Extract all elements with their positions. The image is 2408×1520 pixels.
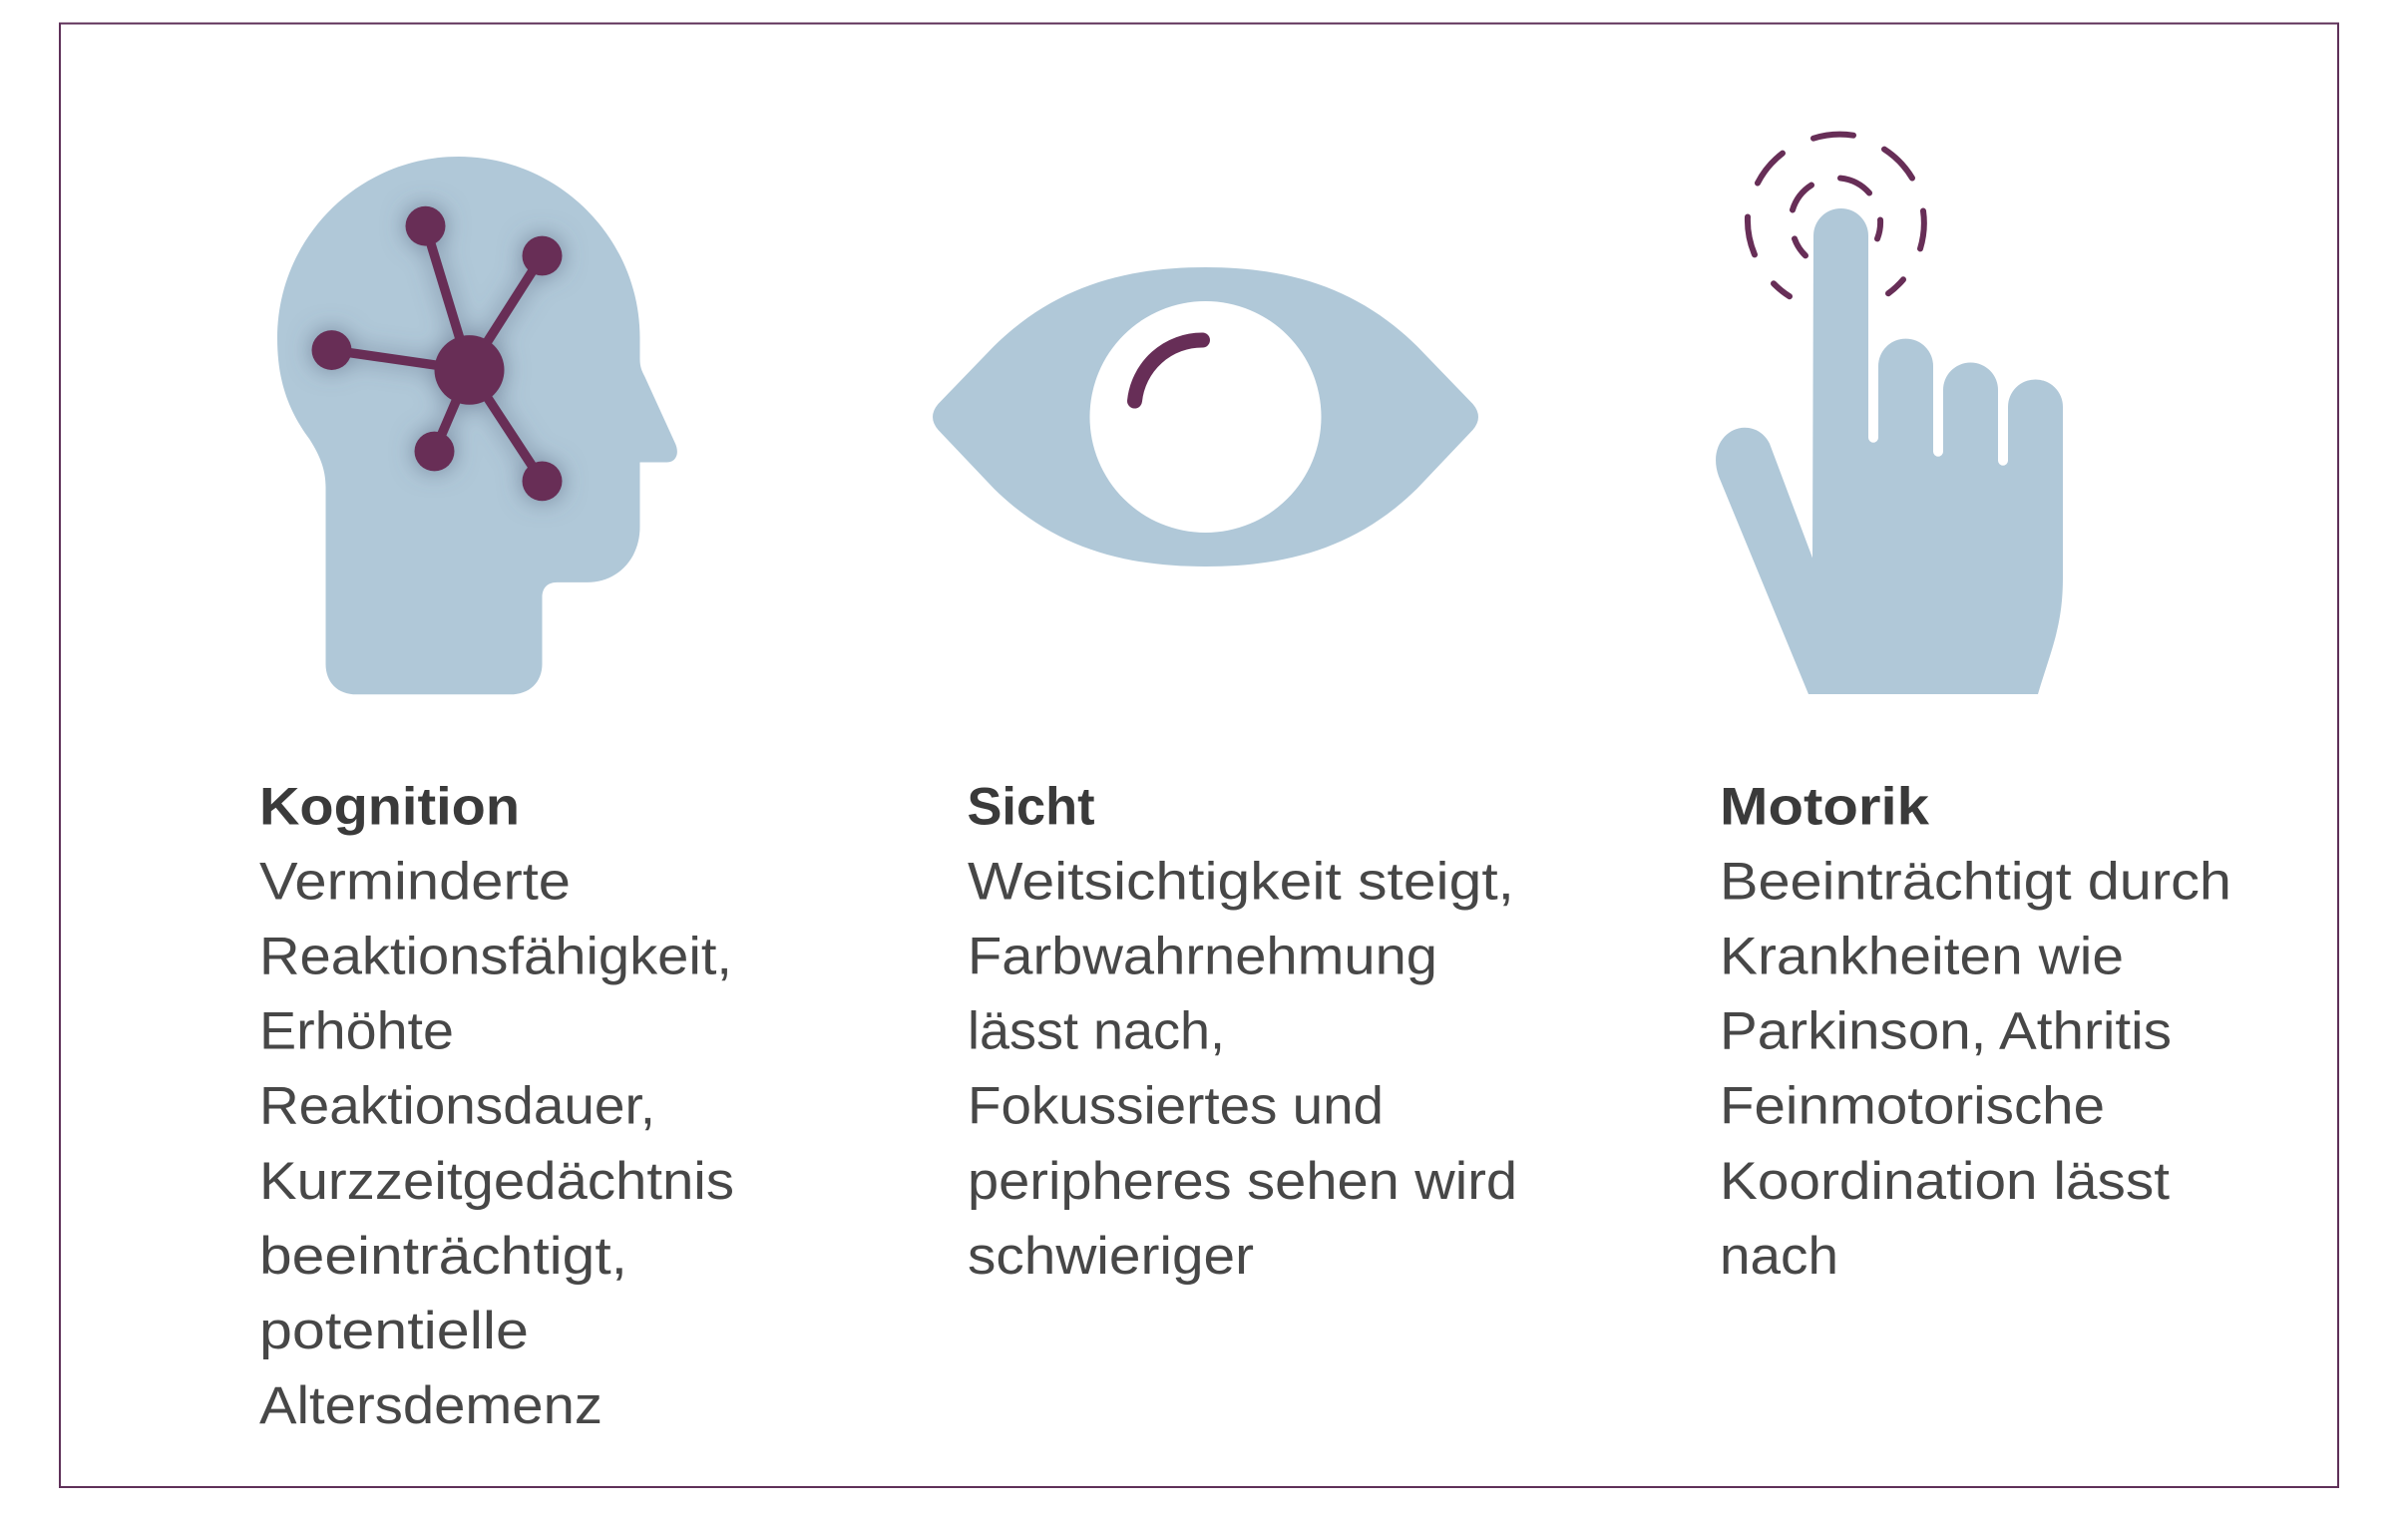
- text block: Motorik: [1720, 778, 2231, 1286]
- text block: Kognition: beeinträchtigt,: [259, 1227, 627, 1286]
- text block: Sicht: Sicht: [968, 778, 1095, 836]
- highlight arc: [1135, 340, 1203, 401]
- text block: Kognition: [259, 778, 734, 1435]
- text block: Kognition: potentielle: [259, 1302, 529, 1360]
- head silhouette: [277, 157, 677, 694]
- text block: Sicht: Weitsichtigkeit steigt,: [968, 852, 1514, 912]
- text block: Motorik: nach: [1720, 1227, 1838, 1286]
- icon: hand tapping: [1716, 135, 2063, 694]
- pupil: [1089, 301, 1321, 533]
- text block: Sicht: peripheres sehen wird: [968, 1152, 1517, 1211]
- text block: Motorik: Koordination lässt: [1720, 1152, 2170, 1211]
- text block: Kognition: Reaktionsfähigkeit,: [259, 928, 732, 985]
- eye shape: [933, 267, 1478, 567]
- tap ripple arcs: [1748, 135, 1924, 296]
- text block: Kognition: Altersdemenz: [259, 1376, 602, 1435]
- text block: Sicht: Fokussiertes und: [968, 1077, 1384, 1135]
- text block: Sicht: [968, 778, 1517, 1286]
- network nodes: [311, 206, 563, 501]
- text block: Sicht: lässt nach,: [968, 1001, 1225, 1061]
- text block: Motorik: Krankheiten wie: [1720, 928, 2124, 985]
- hand silhouette: [1716, 208, 2063, 694]
- text block: Motorik: Parkinson, Athritis: [1720, 1001, 2172, 1061]
- text block: Kognition: Reaktionsdauer,: [259, 1077, 655, 1135]
- text block: Kognition: Kurzzeitgedächtnis: [259, 1152, 734, 1211]
- text block: Kognition: Erhöhte: [259, 1001, 454, 1061]
- text block: Motorik: Motorik: [1720, 778, 1930, 836]
- text block: Sicht: schwieriger: [968, 1227, 1254, 1286]
- text block: Motorik: Feinmotorische: [1720, 1077, 2105, 1135]
- text block: Kognition: Kognition: [259, 778, 520, 836]
- text block: Sicht: Farbwahrnehmung: [968, 928, 1437, 985]
- text block: Motorik: Beeinträchtigt durch: [1720, 852, 2231, 912]
- icon: head with network: [277, 157, 677, 694]
- icon: eye: [933, 267, 1478, 567]
- text block: Kognition: Verminderte: [259, 852, 571, 912]
